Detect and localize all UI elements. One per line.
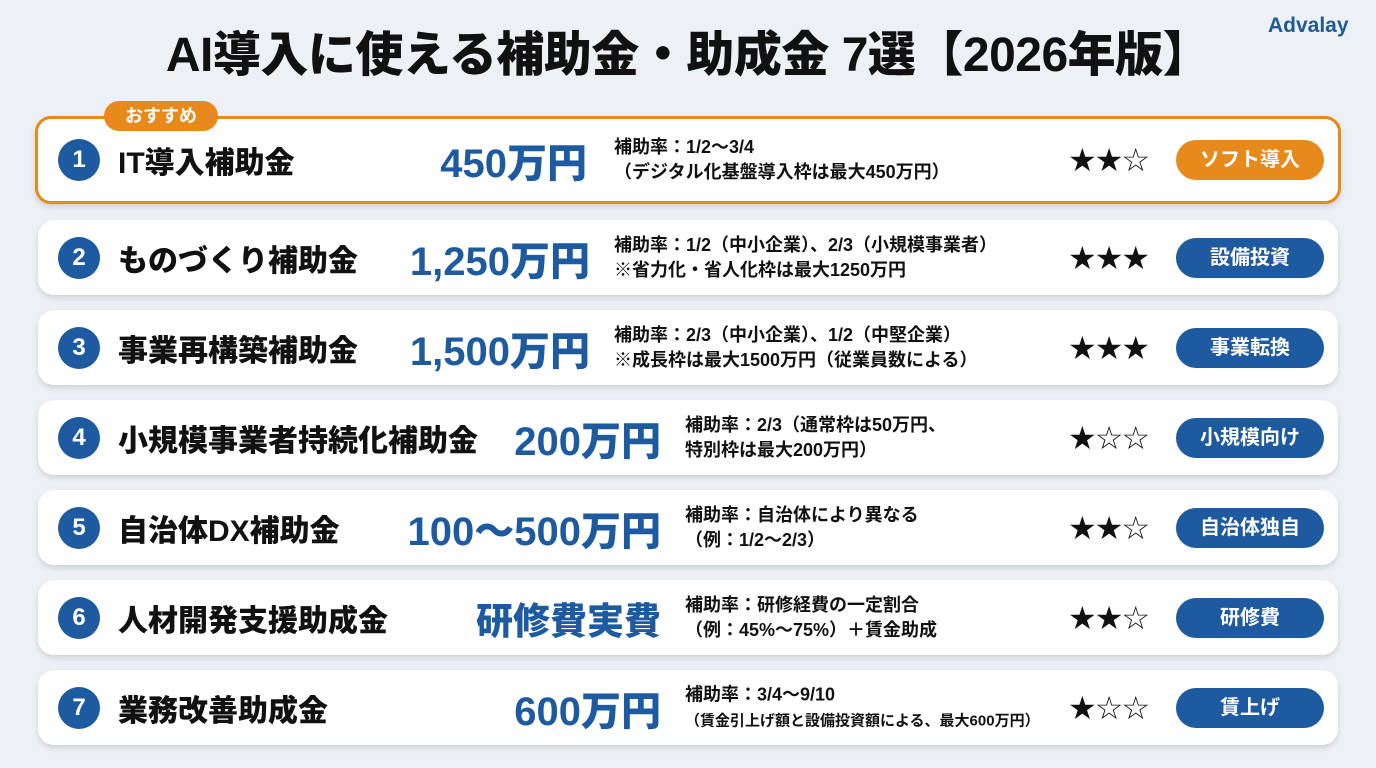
number 6: 6 [72, 604, 86, 630]
badge [1176, 688, 1324, 728]
description: 補助率：1/2（中小企業）、2/3（小規模事業者） [614, 234, 997, 254]
stars: ★☆☆ [1068, 418, 1148, 456]
name: 小規模事業者持続化補助金 [118, 424, 478, 458]
card 1 [35, 116, 1341, 204]
name: 自治体DX補助金 [118, 514, 340, 548]
number 7: 7 [72, 694, 86, 720]
card 2 [38, 220, 1338, 295]
number 5 [58, 506, 100, 548]
name: 業務改善助成金 [118, 694, 328, 728]
description: （賃金引上げ額と設備投資額による、最大600万円） [685, 712, 1040, 729]
logo: Advalay [1268, 14, 1349, 37]
name: ものづくり補助金 [118, 244, 358, 278]
badge: 設備投資 [1210, 246, 1290, 268]
name: IT導入補助金 [118, 147, 295, 180]
description [685, 594, 937, 640]
description: （例：45%〜75%）＋賃金助成 [685, 620, 937, 640]
description: （デジタル化基盤導入枠は最大450万円） [614, 162, 950, 182]
badge [1176, 598, 1324, 638]
amount: 1,500万円 [410, 330, 590, 374]
description: 補助率：3/4〜9/10 [685, 684, 835, 704]
number 5: 5 [72, 514, 86, 540]
recommend tag: おすすめ [125, 106, 197, 126]
description: 補助率：研修経費の一定割合 [685, 594, 919, 614]
card 6 [38, 580, 1338, 655]
description: ※成長枠は最大1500万円（従業員数による） [614, 350, 978, 370]
description: 補助率：自治体により異なる [685, 504, 919, 524]
number 2 [58, 236, 100, 278]
number 3: 3 [72, 334, 86, 360]
card 7 [38, 670, 1338, 745]
description [614, 324, 978, 370]
badge [1176, 418, 1324, 458]
description [685, 414, 946, 460]
card 4 [38, 400, 1338, 475]
badge [1176, 238, 1324, 278]
amount: 200万円 [514, 420, 661, 464]
description: 補助率：2/3（中小企業）、1/2（中堅企業） [614, 324, 961, 344]
card 5 [38, 490, 1338, 565]
number 1: 1 [72, 146, 86, 173]
name: 人材開発支援助成金 [118, 604, 388, 638]
amount: 100〜500万円 [408, 510, 661, 554]
card 3 [38, 310, 1338, 385]
amount: 研修費実費 [476, 600, 661, 642]
number 2: 2 [72, 244, 86, 270]
stars: ★★☆ [1068, 598, 1148, 636]
badge: 研修費 [1220, 606, 1280, 628]
badge: ソフト導入 [1200, 149, 1300, 171]
recommend tag [104, 101, 218, 131]
description [685, 684, 1040, 729]
badge: 小規模向け [1200, 426, 1300, 448]
description: （例：1/2〜2/3） [685, 530, 825, 550]
badge [1176, 140, 1324, 180]
stars: ★☆☆ [1068, 688, 1148, 726]
stars: ★★☆ [1068, 141, 1148, 179]
description [614, 234, 997, 280]
number 6 [58, 596, 100, 638]
number 1 [58, 139, 100, 181]
number 3 [58, 326, 100, 368]
description: 補助率：1/2〜3/4 [614, 137, 754, 157]
number 4: 4 [72, 424, 86, 450]
amount: 450万円 [440, 142, 587, 186]
description: 特別枠は最大200万円） [685, 440, 877, 460]
stars: ★★★ [1068, 238, 1148, 276]
stars: ★★★ [1068, 328, 1148, 366]
badge: 事業転換 [1210, 336, 1290, 358]
badge [1176, 508, 1324, 548]
name: 事業再構築補助金 [118, 334, 358, 368]
number 7 [58, 686, 100, 728]
number 4 [58, 416, 100, 458]
amount: 600万円 [514, 690, 661, 734]
badge: 自治体独自 [1200, 516, 1300, 538]
badge: 賃上げ [1220, 696, 1280, 718]
description [614, 137, 950, 182]
description: 補助率：2/3（通常枠は50万円、 [685, 414, 946, 434]
description: ※省力化・省人化枠は最大1250万円 [614, 260, 906, 280]
stars: ★★☆ [1068, 508, 1148, 546]
badge [1176, 328, 1324, 368]
amount: 1,250万円 [410, 240, 590, 284]
description [685, 504, 919, 550]
title: AI導入に使える補助金・助成金 7選【2026年版】 [166, 29, 1210, 82]
